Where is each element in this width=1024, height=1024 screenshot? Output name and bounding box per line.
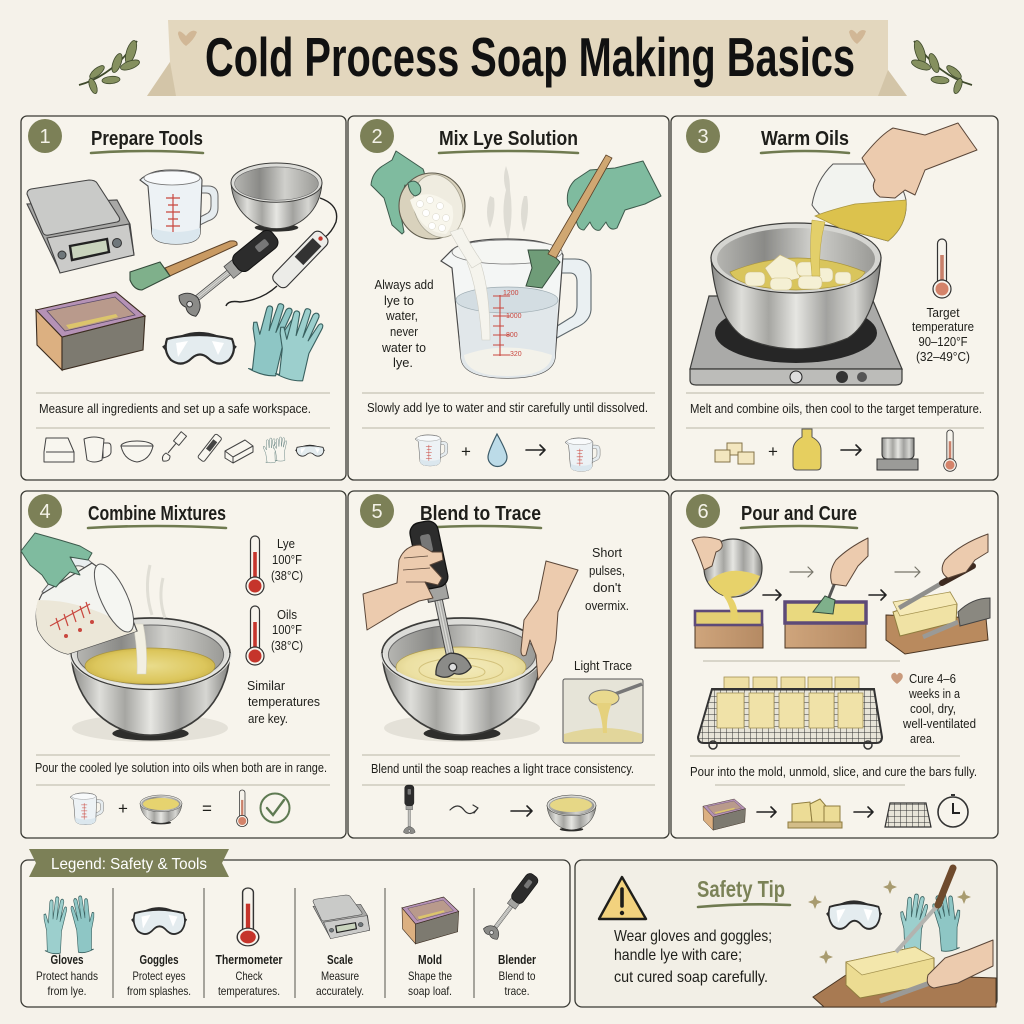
note: short pulses: don't [593,581,622,595]
note: cure 4-6 weeks: cool, dry, [910,702,956,716]
step badge 5 [360,494,394,528]
legend ribbon [29,849,229,877]
faint steam [147,565,165,618]
pot with melting oils [711,223,881,349]
icon: steel bowl [231,163,322,232]
thermometers and temperatures: (38°C) [271,569,303,583]
icon: gloves [241,298,326,384]
side note: always add lye to water: never [390,325,418,339]
steam [487,166,528,240]
safety text: cut cured soap carefully. [614,969,768,986]
note: similar temperatures: Similar [247,679,285,693]
side note: always add lye to water: water, [385,309,418,323]
note: similar temperatures [247,679,320,726]
heading: warm oils: Warm Oils [761,128,849,150]
icon row step 5 [403,785,596,834]
note: short pulses: Short [592,546,623,560]
step badge 1: 1 [39,126,51,148]
legend item: mold: Shape the [408,969,452,983]
safety text: Wear gloves and goggles; [614,928,772,945]
side note: always add lye to water: Always add [374,278,434,292]
gloved hand with spatula [526,155,661,288]
legend item: blender: Blender [498,953,536,967]
thermometers and temperatures: 100°F [272,623,302,637]
panel: legend [21,849,570,1007]
caption step 3: Melt and combine oils, then cool to the target temperature. [690,402,982,416]
hot plate [690,296,902,385]
icon row step 6 [703,795,968,830]
panel: step 2 mix lye solution [348,116,669,480]
heading: pour and cure: Pour and Cure [741,503,857,525]
icon row step 3 [715,429,956,471]
lye stream [133,624,147,674]
inset: light trace: Light Trace [574,659,632,673]
note: target temperature: 90–120°F [918,335,968,349]
step badge 4 [28,494,62,528]
caption step 4: Pour the cooled lye solution into oils when both are in range. [35,761,327,775]
icon: soap mold [36,292,145,370]
icon: goggles [828,903,881,929]
step badge 5: 5 [371,501,383,523]
thermometers and temperatures: (38°C) [271,639,303,653]
note: target temperature: temperature [912,320,974,334]
icon: gloves [897,891,964,954]
arrow thin [790,567,813,577]
legend item: thermometer [216,888,283,998]
step badge 3 [686,119,720,153]
icon row step 2: + [461,442,471,461]
panel: safety tip [575,860,997,1007]
side note: always add lye to water: lye. [393,356,413,370]
thermometers and temperatures: Oils [277,608,297,622]
panel: step 3 warm oils [671,116,998,480]
heading: safety tip: Safety Tip [697,876,785,902]
icon: left leaf sprig [79,39,141,95]
note: short pulses [585,546,629,613]
icon: kitchen scale [27,180,134,273]
heading: blend to trace: Blend to Trace [420,503,541,525]
note: similar temperatures: temperatures [248,695,320,709]
legend item: scale [313,895,370,998]
thermometers and temperatures [246,536,303,665]
gloved hand [21,533,92,587]
legend item: thermometer: temperatures. [218,984,280,998]
legend ribbon: Legend: Safety & Tools [51,856,207,873]
icon row step 1 [44,432,324,463]
icon: goggles [164,335,235,364]
icon: stick blender [176,225,283,318]
caption step 5: Blend until the soap reaches a light trace consistency. [371,762,634,776]
thermometers and temperatures: 100°F [272,553,302,567]
legend item: mold [402,897,459,998]
safety text: handle lye with care; [614,947,742,964]
caption step 6: Pour into the mold, unmold, slice, and cure the bars fully. [690,765,977,779]
large measuring cup with water [441,239,591,378]
panel: step 6 pour and cure [671,491,998,838]
icon: spatula [130,241,237,290]
legend item: scale: Measure [321,969,359,983]
note: cure 4-6 weeks: area. [910,732,935,746]
inset: light trace [563,659,643,743]
legend item: goggles: from splashes. [127,984,191,998]
large measuring cup with water: 800 [506,332,518,339]
sparkles [808,880,971,964]
step badge 6 [686,494,720,528]
step badge 2: 2 [371,126,383,148]
legend item: scale: accurately. [316,984,364,998]
note: cure 4-6 weeks [891,672,976,746]
legend item: goggles [127,910,191,998]
legend item: blender [482,870,541,998]
legend item: scale: Scale [327,953,353,967]
legend item: goggles: Goggles [140,953,179,967]
spread soap in mold [785,538,868,648]
panel: step 4 combine mixtures [21,491,346,838]
legend item: gloves: Protect hands [36,969,98,983]
note: short pulses: pulses, [589,564,625,578]
step badge 3: 3 [697,126,709,148]
legend item: gloves: Gloves [50,953,84,967]
legend item: blender: Blend to [498,969,536,983]
step badge 6: 6 [697,501,709,523]
jug pouring [36,556,141,654]
icon: warning triangle [599,877,646,919]
bowl with soap batter [382,618,542,742]
note: cure 4-6 weeks: weeks in a [908,687,960,701]
illustration: cutting soap loaf [813,868,996,1007]
legend item: goggles: Protect eyes [132,969,186,983]
icon row step 4: + [118,799,128,818]
icon: right leaf sprig [910,39,972,95]
icon: thermometer [933,239,951,298]
note: similar temperatures: are key. [248,712,288,726]
step badge 2 [360,119,394,153]
icon row step 3: + [768,442,778,461]
second hand on bowl [521,561,578,680]
note: target temperature [912,306,974,364]
legend item: gloves: from lye. [48,984,86,998]
arrow [763,590,781,600]
side note: always add lye to water: water to [381,341,426,355]
panel: step 5 blend to trace [348,491,669,838]
icon row step 4 [70,790,290,827]
side note: always add lye to water: lye to [384,294,414,308]
note: target temperature: Target [926,306,960,320]
legend item: mold: soap loaf. [408,984,452,998]
heading: prepare tools: Prepare Tools [91,128,203,150]
side note: always add lye to water [374,278,434,370]
arrow [869,590,886,600]
icon row step 4: = [202,799,212,818]
step badge 1 [28,119,62,153]
note: short pulses: overmix. [585,599,629,613]
legend item: blender: trace. [504,984,530,998]
slicing soap loaf [886,534,990,654]
large measuring cup with water: 1000 [506,313,522,320]
pour into mold [692,537,763,648]
large measuring cup with water: 1200 [503,290,519,297]
title banner [147,20,907,96]
note: cure 4-6 weeks: well-ventilated [902,717,976,731]
heading: mix lye solution: Mix Lye Solution [439,128,578,150]
legend item: gloves [36,894,98,998]
oil pouring from jug held by hand [810,123,977,276]
cooling rack with soap bars [698,677,882,749]
icon row step 2 [415,434,600,471]
heading: combine mixtures: Combine Mixtures [88,503,226,525]
note: target temperature: (32–49°C) [916,350,970,364]
legend item: thermometer: Thermometer [216,953,283,967]
legend item: mold: Mold [418,953,442,967]
legend item: thermometer: Check [236,969,263,983]
note: cure 4-6 weeks: Cure 4–6 [909,672,956,686]
caption step 2: Slowly add lye to water and stir carefully until dissolved. [367,401,648,415]
icon: probe thermometer [226,198,337,306]
icon: measuring cup [140,170,218,244]
thermometers and temperatures: Lye [277,537,295,551]
panel: step 1 prepare tools [21,116,346,480]
large measuring cup with water: 320 [510,351,522,358]
hand with bowl of lye [371,151,482,268]
step badge 4: 4 [39,501,51,523]
arrow thin [895,567,920,577]
blender held by hand [363,518,472,679]
caption step 1: Measure all ingredients and set up a safe workspace. [39,402,311,416]
safety text [614,928,772,986]
bowl with oils [71,618,230,742]
